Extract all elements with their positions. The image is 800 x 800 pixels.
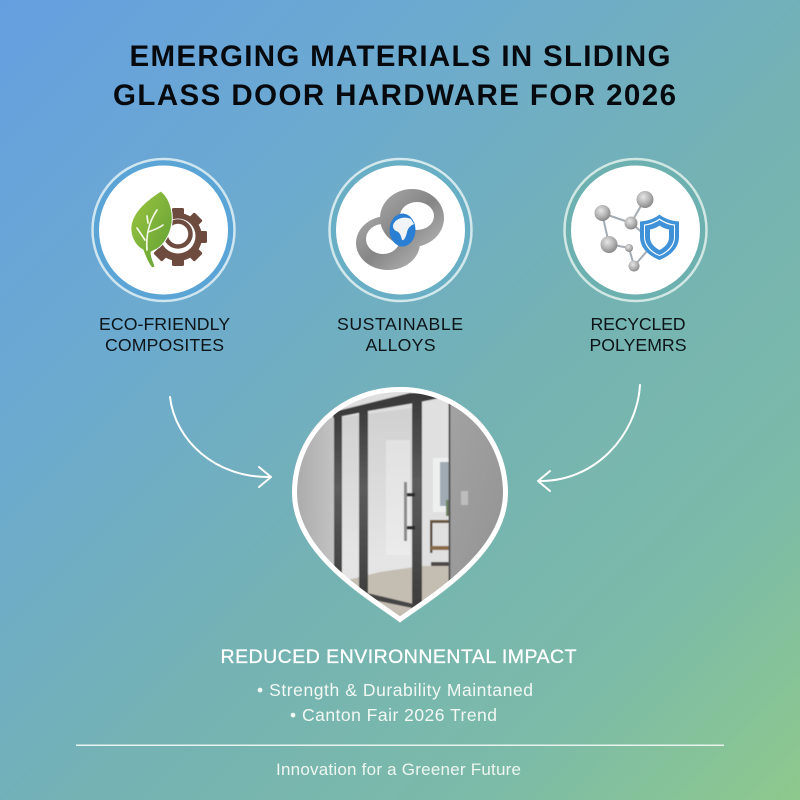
bullet list: • Canton Fair 2026 Trend xyxy=(290,705,497,725)
label: eco-friendly composites xyxy=(99,314,230,355)
icon: leaf xyxy=(131,191,172,268)
door photo in teardrop frame xyxy=(288,383,512,627)
door frame xyxy=(333,393,445,610)
ceiling xyxy=(323,387,456,418)
icon: gear xyxy=(149,208,207,266)
icon: shield xyxy=(640,214,679,260)
label: eco-friendly composites: COMPOSITES xyxy=(105,335,224,355)
door handle xyxy=(404,482,415,541)
icon circle: recycled polymers xyxy=(564,159,706,301)
right wall xyxy=(450,404,508,580)
title xyxy=(113,40,676,112)
arrow: right curve to door xyxy=(538,385,640,491)
left wall xyxy=(292,418,335,566)
icon circle: sustainable alloys xyxy=(330,159,472,301)
title: GLASS DOOR HARDWARE FOR 2026 xyxy=(113,79,676,112)
panel: recycled polymers xyxy=(564,159,706,355)
bullet list xyxy=(257,680,533,725)
label: sustainable alloys: SUSTAINABLE xyxy=(337,314,463,334)
icon: lower alloy ring xyxy=(356,216,420,270)
label: recycled polymers: POLYEMRS xyxy=(590,335,686,355)
panel: eco-friendly composites xyxy=(92,159,234,355)
room beyond door xyxy=(422,398,450,568)
bullet list: • Strength & Durability Maintaned xyxy=(257,680,533,700)
label: recycled polymers: RECYCLED xyxy=(590,314,686,334)
title: EMERGING MATERIALS IN SLIDING xyxy=(130,40,670,73)
icon: molecule xyxy=(594,191,654,272)
label: eco-friendly composites: ECO-FRIENDLY xyxy=(99,314,230,334)
arrow: left curve to door xyxy=(170,397,271,487)
glass panels xyxy=(341,408,413,580)
panel: sustainable alloys xyxy=(330,159,472,355)
label: sustainable alloys xyxy=(337,314,463,355)
label: sustainable alloys: ALLOYS xyxy=(366,335,436,355)
icon: upper alloy ring xyxy=(380,189,444,247)
label: recycled polymers xyxy=(590,314,686,355)
teardrop outline xyxy=(294,390,506,620)
light switch xyxy=(461,491,468,505)
icon circle: eco-friendly composites xyxy=(92,159,234,301)
glass reflection xyxy=(386,440,410,530)
icon: globe xyxy=(390,214,416,246)
heading: reduced environmental impact: REDUCED ENVIRONNENTAL IMPACT xyxy=(220,646,577,668)
footer tagline: Innovation for a Greener Future xyxy=(276,760,521,779)
floor xyxy=(350,565,450,616)
